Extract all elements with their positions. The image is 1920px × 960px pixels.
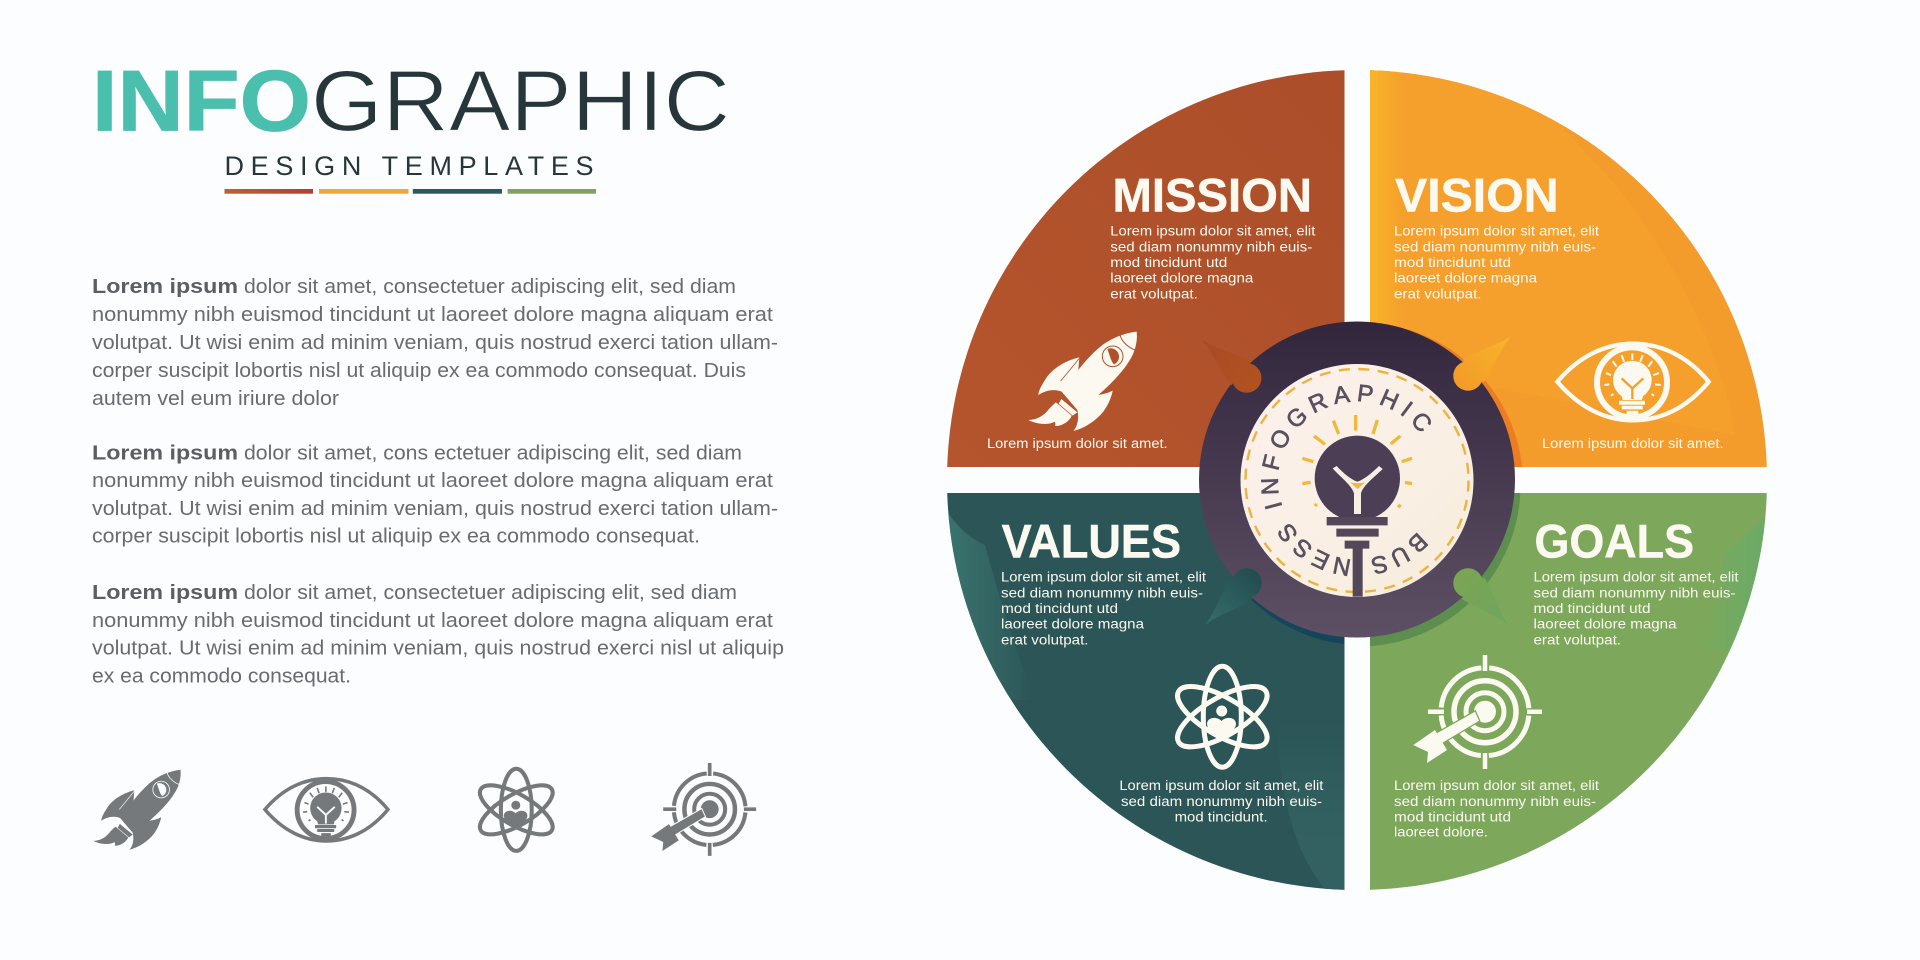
text block: paragraph 2: corper suscipit lobortis nisl ut aliquip ex ea commodo consequat. — [92, 526, 700, 548]
vision wedge — [1370, 70, 1767, 467]
mission body text — [1110, 224, 1316, 302]
text block: paragraph 3: nonummy nibh euismod tincidunt ut laoreet dolore magna aliquam erat — [92, 610, 773, 632]
mission body text: laoreet dolore magna — [1110, 270, 1254, 286]
vision heading: VISION — [1395, 169, 1559, 222]
mission body text: mod tincidunt utd — [1110, 255, 1227, 270]
icon: rocket — [93, 770, 181, 850]
title: INFO — [92, 54, 311, 150]
mission wedge — [947, 70, 1344, 467]
text block: paragraph 2: volutpat. Ut wisi enim ad minim veniam, quis nostrud exerci tation ullam- — [92, 498, 778, 520]
goals heading: GOALS — [1534, 515, 1694, 568]
text block: paragraph 2: dolor sit amet, cons ectetuer adipiscing elit, sed diam — [244, 442, 742, 464]
values caption: sed diam nonummy nibh euis- — [1121, 794, 1322, 809]
subtitle: DESIGN TEMPLATES — [224, 151, 594, 181]
arrow notch: values — [1194, 562, 1268, 636]
arrow notch: goals — [1447, 562, 1521, 637]
icon: goals target — [1413, 655, 1542, 769]
values body text: laoreet dolore magna — [1001, 616, 1145, 632]
mission body text: sed diam nonummy nibh euis- — [1110, 240, 1312, 254]
panel: values — [946, 493, 1345, 895]
vision body text — [1394, 224, 1599, 302]
mission heading: MISSION — [1112, 169, 1312, 222]
panel: goals — [1370, 493, 1770, 890]
icon: target with arrow — [651, 763, 756, 856]
values body text — [1001, 570, 1206, 648]
panel: vision — [1370, 60, 1767, 467]
values swoop shading — [946, 510, 1345, 895]
goals body text: sed diam nonummy nibh euis- — [1534, 586, 1736, 600]
text block: paragraph 1: volutpat. Ut wisi enim ad minim veniam, quis nostrud exerci tation ullam- — [92, 332, 778, 354]
text block: paragraph 3: Lorem ipsum — [92, 582, 238, 604]
title — [92, 54, 730, 150]
text block: paragraph 1: Lorem ipsum — [92, 276, 238, 298]
circular text: INFOGRAPHIC — [1261, 384, 1431, 510]
goals caption: laoreet dolore. — [1394, 824, 1488, 840]
icon: atom with heart — [473, 769, 560, 851]
goals body text: erat volutpat. — [1534, 632, 1621, 648]
icon: values atom — [1169, 666, 1276, 767]
vision body text: laoreet dolore magna — [1394, 270, 1538, 286]
goals caption — [1394, 778, 1599, 840]
mission caption: Lorem ipsum dolor sit amet. — [987, 436, 1168, 451]
mission body text: Lorem ipsum dolor sit amet, elit — [1110, 224, 1316, 239]
vision body text: Lorem ipsum dolor sit amet, elit — [1394, 224, 1599, 239]
hub shadows — [1228, 325, 1522, 646]
goals caption: mod tincidunt utd — [1394, 810, 1511, 824]
goals caption: sed diam nonummy nibh euis- — [1394, 794, 1596, 809]
vision caption: Lorem ipsum dolor sit amet. — [1542, 436, 1724, 451]
text block: paragraph 3: dolor sit amet, consectetuer adipiscing elit, sed diam — [244, 582, 737, 604]
goals shading — [1727, 518, 1766, 650]
text block: paragraph 1: nonummy nibh euismod tincidunt ut laoreet dolore magna aliquam erat — [92, 304, 773, 326]
icon: mission rocket — [1028, 332, 1137, 431]
icon: eye with bulb — [265, 779, 388, 841]
goals caption: Lorem ipsum dolor sit amet, elit — [1394, 778, 1599, 793]
circular text bottom: BUSINESS — [1278, 524, 1428, 576]
hub ring — [1199, 322, 1515, 638]
goals body text: mod tincidunt utd — [1534, 601, 1650, 616]
arrow notch: vision — [1447, 324, 1522, 397]
centre hub — [1199, 322, 1522, 646]
values body text: sed diam nonummy nibh euis- — [1001, 586, 1203, 600]
title: GRAPHIC — [311, 54, 730, 150]
text block: paragraph 3 — [92, 582, 784, 688]
mission body text: erat volutpat. — [1110, 286, 1198, 302]
bulb base — [1327, 517, 1388, 597]
dashed ring — [1246, 369, 1468, 592]
panel: mission — [947, 70, 1344, 467]
goals body text — [1534, 570, 1739, 648]
icon row: grey icons — [93, 763, 756, 856]
values body text: Lorem ipsum dolor sit amet, elit — [1001, 570, 1206, 585]
values wedge — [947, 493, 1344, 890]
text block: paragraph 1: corper suscipit lobortis nisl ut aliquip ex ea commodo consequat. Duis — [92, 360, 746, 382]
bulb glass — [1315, 436, 1400, 521]
values caption — [1119, 778, 1324, 824]
values caption: Lorem ipsum dolor sit amet, elit — [1119, 778, 1324, 793]
text block: paragraph 2: Lorem ipsum — [92, 442, 238, 464]
text block: paragraph 1: autem vel eum iriure dolor — [92, 388, 339, 410]
vision body text: mod tincidunt utd — [1394, 255, 1511, 270]
vision body text: erat volutpat. — [1394, 286, 1482, 302]
bulb filament — [1333, 466, 1383, 514]
vision shading — [1370, 70, 1558, 326]
vision body text: sed diam nonummy nibh euis- — [1394, 240, 1596, 254]
text block: paragraph 3: volutpat. Ut wisi enim ad minim veniam, quis nostrud exerci nisl ut aliquip — [92, 638, 784, 660]
goals wedge — [1370, 493, 1767, 890]
bulb rays — [1302, 415, 1412, 507]
values body text: mod tincidunt utd — [1001, 601, 1118, 616]
text block: paragraph 1 — [92, 276, 778, 410]
values body text: erat volutpat. — [1001, 632, 1088, 648]
icon: light bulb — [1302, 415, 1412, 597]
values caption: mod tincidunt. — [1175, 810, 1268, 824]
text block: paragraph 1: dolor sit amet, consectetuer adipiscing elit, sed diam — [244, 276, 736, 298]
arrow notch: mission — [1191, 327, 1268, 399]
text block: paragraph 2 — [92, 442, 778, 548]
colour key bars — [224, 189, 596, 194]
text block: paragraph 3: ex ea commodo consequat. — [92, 666, 351, 688]
icon: vision eye — [1557, 344, 1709, 420]
text block: paragraph 2: nonummy nibh euismod tincidunt ut laoreet dolore magna aliquam erat — [92, 470, 773, 492]
goals body text: Lorem ipsum dolor sit amet, elit — [1534, 570, 1739, 585]
hub disc — [1240, 364, 1474, 597]
goals body text: laoreet dolore magna — [1534, 616, 1677, 632]
values heading: VALUES — [1002, 515, 1181, 568]
bulb spark — [1350, 482, 1365, 489]
